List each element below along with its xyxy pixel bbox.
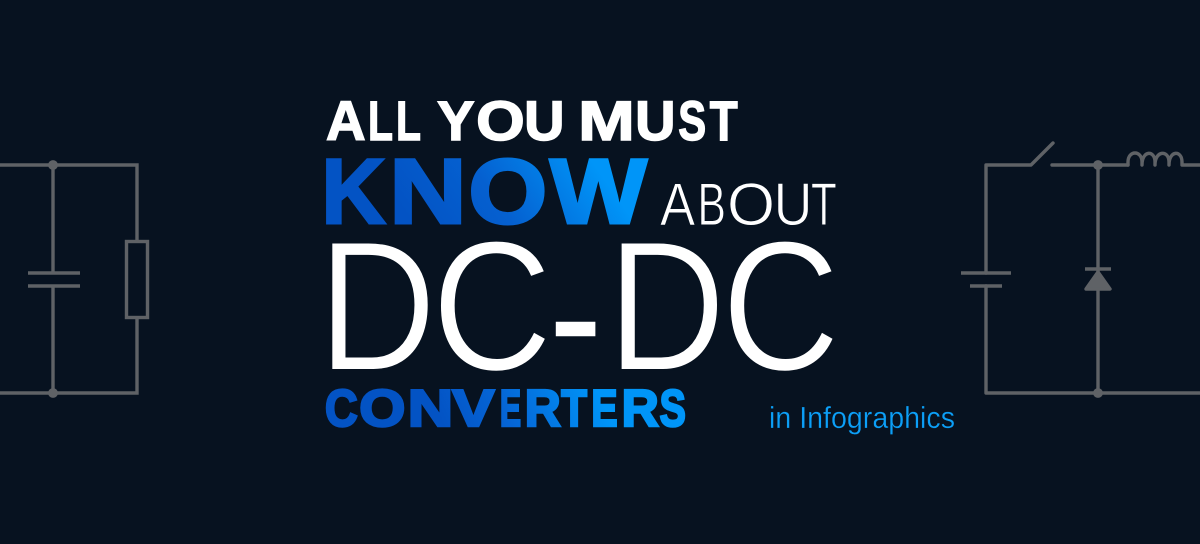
heading: dc-dc xyxy=(318,203,840,418)
heading: all you must: T xyxy=(710,89,738,152)
heading: converters: E xyxy=(591,380,618,438)
heading: converters: V xyxy=(452,380,495,438)
heading: converters: N xyxy=(408,380,453,438)
heading: converters: R xyxy=(525,380,561,438)
heading: all you must: U xyxy=(524,89,564,152)
heading: converters: E xyxy=(500,380,521,438)
heading: know xyxy=(322,141,647,243)
heading: dc-dc: - xyxy=(549,211,603,418)
heading: dc-dc: D xyxy=(607,203,726,410)
heading: all you must: U xyxy=(635,89,676,152)
title xyxy=(318,89,955,438)
heading: converters: T xyxy=(561,380,587,438)
heading: all you must: M xyxy=(578,89,635,152)
heading: converters: S xyxy=(660,380,686,438)
subtitle: in infographics: in Infographics xyxy=(769,400,955,435)
heading: dc-dc: C xyxy=(721,203,840,410)
heading: converters: C xyxy=(325,380,358,438)
heading: about: O xyxy=(727,171,775,238)
heading: converters xyxy=(325,380,686,438)
icon: right circuit with battery, switch, diode and inductor xyxy=(961,143,1200,396)
heading: know: O xyxy=(468,141,547,243)
heading: all you must: L xyxy=(368,89,393,152)
heading: all you must: A xyxy=(326,89,366,152)
heading: all you must xyxy=(326,89,738,152)
heading: about xyxy=(660,171,837,238)
heading: know: K xyxy=(322,141,385,243)
heading: all you must: S xyxy=(678,89,706,152)
heading: all you must: L xyxy=(396,89,421,152)
heading: know: N xyxy=(389,141,467,243)
heading: dc-dc: C xyxy=(431,203,553,410)
heading: all you must: O xyxy=(476,89,525,152)
heading: know: W xyxy=(550,141,647,243)
heading: converters: O xyxy=(359,380,405,438)
heading: all you must: Y xyxy=(437,89,475,152)
icon: left circuit with capacitor and resistor xyxy=(0,162,148,396)
heading: dc-dc: D xyxy=(318,203,437,410)
heading: about: T xyxy=(811,171,837,238)
heading: converters: R xyxy=(622,380,659,438)
heading: about: U xyxy=(774,171,812,238)
heading: about: A xyxy=(660,171,695,238)
heading: about: B xyxy=(698,171,726,238)
